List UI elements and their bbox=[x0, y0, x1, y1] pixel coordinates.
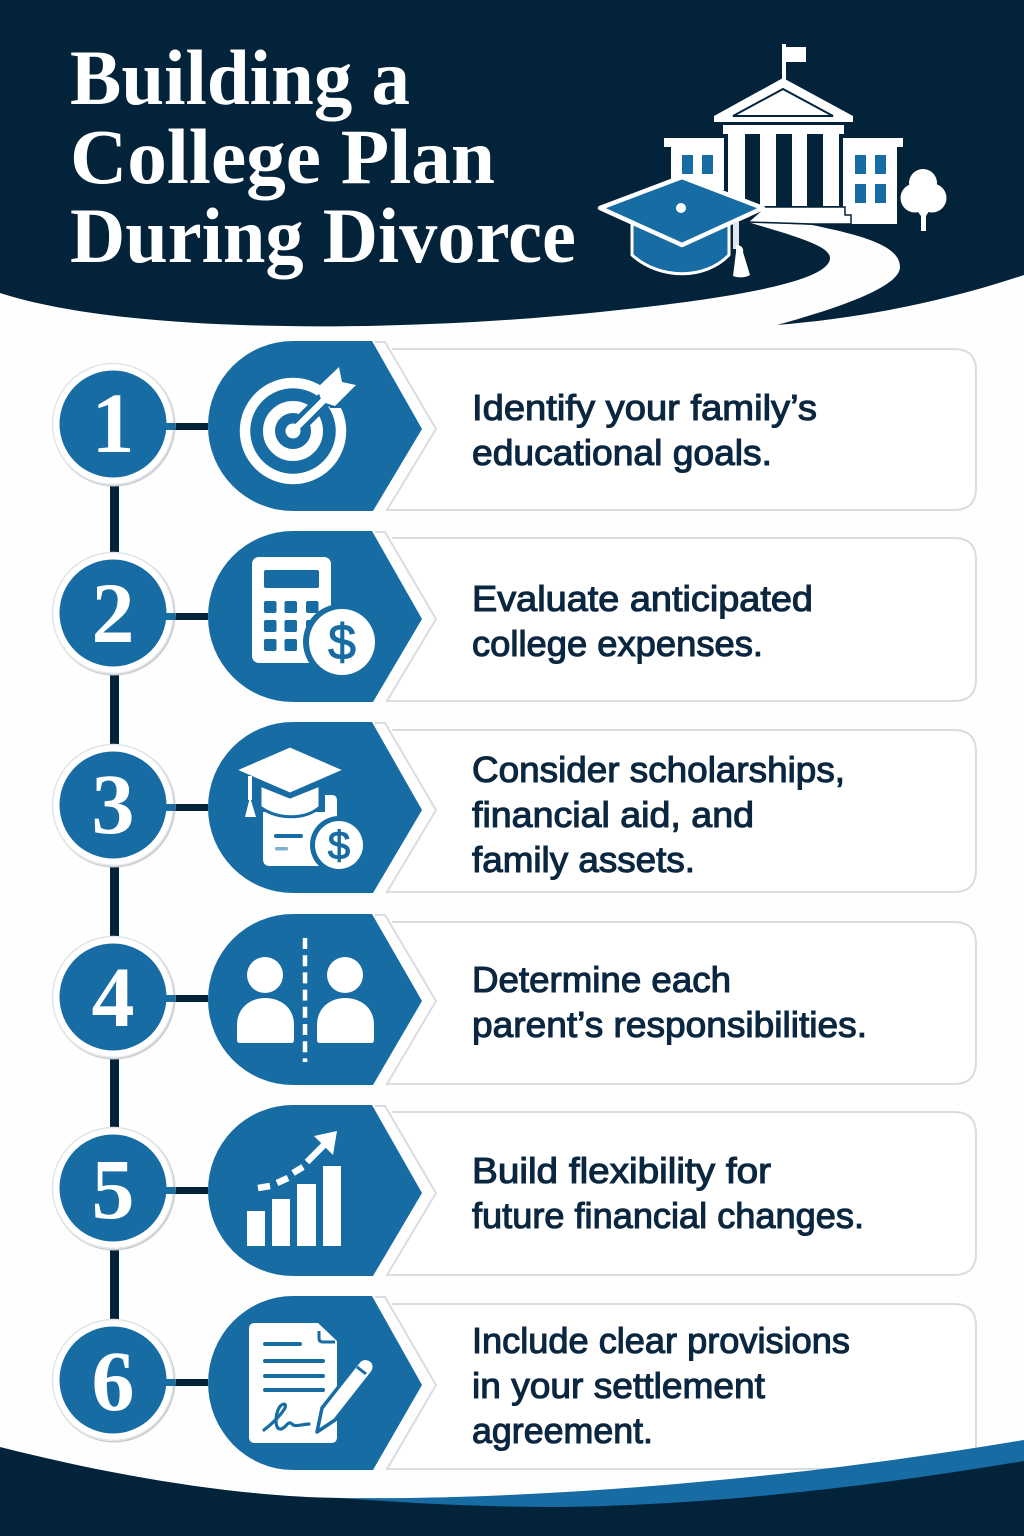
step 2 text bbox=[472, 578, 813, 664]
number badge 3: 3 bbox=[92, 756, 134, 852]
icon: rising bars with dashed arrow bbox=[247, 1131, 341, 1246]
card 3 bbox=[375, 723, 976, 892]
icon: signed document and pen bbox=[249, 1323, 374, 1443]
step 3 text bbox=[472, 749, 845, 880]
step 5 bbox=[52, 1105, 976, 1276]
step 5 text: future financial changes. bbox=[472, 1195, 864, 1236]
title: Building a bbox=[70, 34, 410, 121]
icon: two parents divided by a dashed line bbox=[237, 938, 374, 1062]
icon panel 4 bbox=[208, 914, 422, 1085]
icon: calculator with dollar coin bbox=[252, 557, 379, 680]
icon: graduation cap, document and coin bbox=[237, 747, 368, 874]
card 2 bbox=[375, 532, 976, 701]
left wing bbox=[664, 138, 724, 190]
graduation cap bbox=[600, 177, 763, 277]
icon panel 6 bbox=[208, 1296, 422, 1470]
step 3 text: Consider scholarships, bbox=[472, 749, 845, 790]
colonnade bbox=[723, 125, 844, 208]
header banner bbox=[0, 0, 1024, 326]
number badge 2 bbox=[52, 552, 176, 676]
number badge 6 bbox=[52, 1320, 176, 1442]
icon panel 5 bbox=[208, 1105, 422, 1276]
icon: college building with graduation cap and path bbox=[600, 44, 946, 277]
step 3 text: financial aid, and bbox=[472, 794, 754, 835]
step 6 bbox=[52, 1296, 976, 1470]
icon panel 1 bbox=[208, 341, 422, 511]
step 1 text: educational goals. bbox=[472, 432, 772, 473]
pediment roof bbox=[714, 78, 853, 122]
title: During Divorce bbox=[70, 192, 576, 279]
step 1 text: Identify your family’s bbox=[472, 387, 817, 428]
entrance steps bbox=[748, 207, 851, 224]
icon: calculator with dollar coin: $ bbox=[328, 614, 356, 670]
step 6 text: in your settlement bbox=[472, 1365, 765, 1406]
number badge 5: 5 bbox=[92, 1141, 134, 1237]
footer band bbox=[0, 1440, 1024, 1536]
step 4 text: Determine each bbox=[472, 959, 731, 1000]
card 5 bbox=[375, 1106, 976, 1275]
step 5 text bbox=[472, 1150, 864, 1236]
step 1 bbox=[52, 341, 976, 511]
step 3 bbox=[52, 722, 976, 893]
timeline connector bbox=[110, 423, 208, 1386]
step 6 text bbox=[472, 1320, 850, 1451]
card 4 bbox=[375, 915, 976, 1084]
icon panel 3 bbox=[208, 722, 422, 893]
step 3 text: family assets. bbox=[472, 839, 695, 880]
number badge 3 bbox=[52, 744, 176, 868]
footer accent bbox=[340, 1440, 1024, 1536]
step 2 text: Evaluate anticipated bbox=[472, 578, 813, 619]
step 1 text bbox=[472, 387, 817, 473]
icon: graduation cap, document and coin: $ bbox=[328, 824, 350, 868]
number badge 2: 2 bbox=[92, 565, 134, 661]
number badge 1 bbox=[52, 364, 176, 486]
number badge 6: 6 bbox=[92, 1333, 134, 1429]
step 6 text: Include clear provisions bbox=[472, 1320, 850, 1361]
icon: target with arrow bbox=[245, 367, 356, 479]
step 2 text: college expenses. bbox=[472, 623, 763, 664]
right wing bbox=[843, 138, 903, 224]
step 4 text bbox=[472, 959, 867, 1045]
title bbox=[70, 34, 576, 279]
flag bbox=[782, 44, 806, 80]
card 6 bbox=[375, 1297, 976, 1469]
number badge 4: 4 bbox=[92, 949, 134, 1045]
step 4 text: parent’s responsibilities. bbox=[472, 1004, 867, 1045]
title: College Plan bbox=[70, 113, 495, 200]
card 1 bbox=[375, 342, 976, 510]
step 2 bbox=[52, 531, 976, 702]
step 4 bbox=[52, 914, 976, 1085]
step 6 text: agreement. bbox=[472, 1410, 653, 1451]
step 5 text: Build flexibility for bbox=[472, 1150, 771, 1191]
number badge 1: 1 bbox=[92, 375, 134, 471]
tree bbox=[900, 169, 946, 231]
number badge 5 bbox=[52, 1128, 176, 1250]
number badge 4 bbox=[52, 936, 176, 1060]
icon panel 2 bbox=[208, 531, 422, 702]
